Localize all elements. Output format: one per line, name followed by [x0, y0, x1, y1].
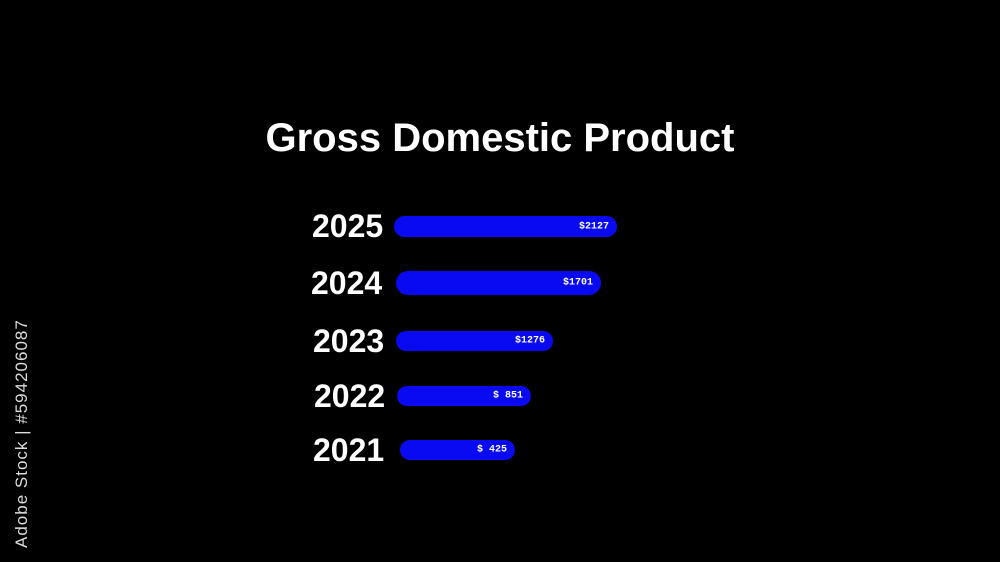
bar chart	[311, 208, 617, 468]
bar chart: 2025	[312, 208, 383, 244]
bar chart: $ 425	[477, 444, 507, 456]
bar chart: $ 851	[493, 390, 523, 402]
row 2022	[314, 378, 531, 414]
bar chart: 2024	[311, 265, 382, 301]
row 2025	[312, 208, 617, 244]
bar chart: $1276	[515, 336, 545, 346]
row 2024	[311, 265, 601, 301]
row 2021	[313, 432, 515, 468]
side watermark text: Adobe Stock | #594206087	[12, 319, 31, 548]
bar chart: $1701	[563, 278, 593, 288]
title: Gross Domestic Product	[265, 116, 734, 160]
bar chart: $2127	[579, 221, 609, 232]
bar chart: 2022	[314, 378, 385, 414]
bar chart: 2023	[313, 323, 384, 359]
row 2023	[313, 323, 553, 359]
bar chart: 2021	[313, 432, 384, 468]
